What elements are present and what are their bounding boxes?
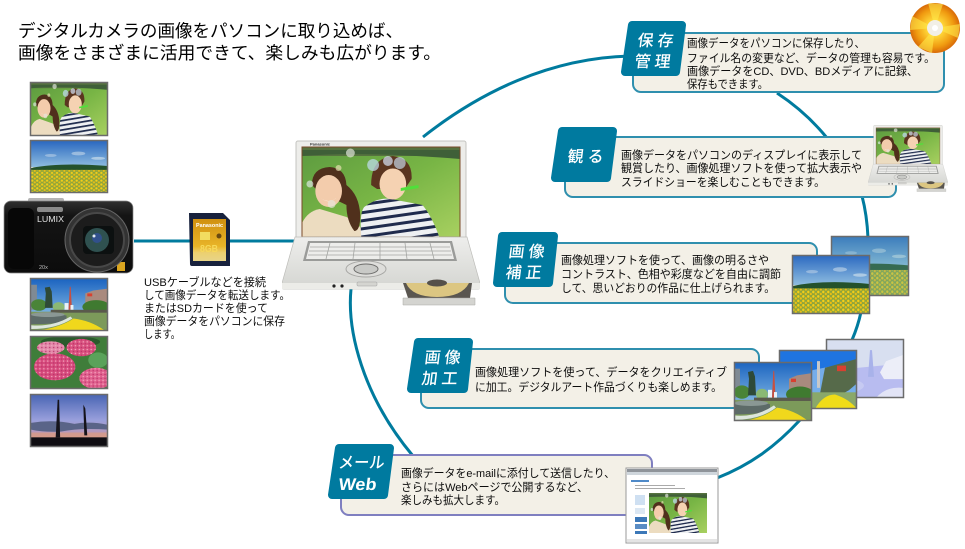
badge: 観る	[555, 131, 613, 178]
panel: 画像補正: コントラスト、色相や彩度などを自由に調節	[561, 267, 781, 281]
caption: USB transfer: して画像データを転送します。	[144, 288, 290, 302]
badge: 保存管理	[625, 25, 682, 72]
panel: 保存管理: 保存もできます。	[687, 77, 768, 91]
title: 画像をさまざまに活用できて、楽しみも広がります。	[18, 43, 441, 63]
icon: optical disc	[910, 3, 960, 53]
panel: 保存管理: 画像データをCD、DVD、BDメディアに記録、	[687, 64, 918, 78]
badge: 画像補正: 画像	[508, 243, 546, 261]
panel: メール Web	[332, 448, 652, 515]
icon: digital camera	[4, 198, 133, 273]
icon: SD card: 8GB	[200, 244, 218, 255]
badge: 画像加工	[411, 342, 469, 389]
photo thumbnails column	[30, 82, 113, 446]
panel: 画像補正	[497, 236, 817, 303]
panel: 保存管理: 画像データをパソコンに保存したり、	[687, 36, 865, 50]
caption: USB transfer: USBケーブルなどを接続	[144, 275, 267, 289]
photos: creative edits	[734, 339, 904, 421]
panel: 観る: スライドショーを楽しむこともできます。	[621, 176, 825, 189]
icon: SD card	[189, 213, 230, 266]
panel: 観る: 観賞したり、画像処理ソフトを使って拡大表示や	[621, 161, 862, 175]
badge: 画像加工: 加工	[421, 370, 459, 388]
icon: web page screenshot	[626, 468, 718, 543]
icon: SD card: Panasonic	[196, 223, 223, 229]
title: デジタルカメラの画像をパソコンに取り込めば、	[18, 21, 403, 41]
badge: 保存管理: 管理	[634, 53, 672, 71]
caption: USB transfer: またはSDカードを使って	[144, 301, 268, 315]
badge: 画像補正: 補正	[505, 264, 543, 282]
panel: 保存管理: ファイル名の変更など、データの管理も容易です。	[687, 51, 935, 65]
icon: main laptop	[282, 141, 480, 305]
panel: 観る: 画像データをパソコンのディスプレイに表示して	[621, 148, 862, 162]
panel: 画像補正: して、思いどおりの作品に仕上げられます。	[561, 282, 775, 295]
panel: メール Web: さらにはWebページで公開するなど、	[401, 481, 588, 494]
icon: small laptop	[868, 125, 948, 192]
panel: 画像加工: に加工。デジタルアート作品づくりも楽しめます。	[475, 380, 722, 394]
badge: メール Web: Web	[338, 475, 378, 494]
panel: 画像補正: 画像処理ソフトを使って、画像の明るさや	[561, 253, 769, 267]
icon: main laptop: Panasonic	[310, 142, 331, 146]
badge: メール Web: メール	[338, 454, 386, 472]
connecting arcs	[134, 56, 868, 478]
badge: 画像補正	[497, 236, 554, 283]
panel: 画像加工: 画像処理ソフトを使って、データをクリエイティブ	[475, 365, 727, 379]
caption: USB transfer: します。	[144, 328, 180, 341]
photos: before and after correction	[792, 236, 909, 314]
badge: メール Web	[332, 448, 390, 495]
panel: 画像加工	[411, 342, 759, 408]
icon: digital camera: 20x	[39, 265, 48, 271]
panel: メール Web: 楽しみも拡大します。	[401, 493, 505, 507]
panel: 保存管理	[625, 25, 944, 92]
badge: 観る: 観る	[567, 148, 605, 166]
badge: 画像加工: 画像	[424, 349, 462, 367]
badge: 保存管理: 保存	[637, 32, 675, 50]
icon: digital camera: LUMIX	[37, 214, 64, 224]
title	[18, 21, 441, 63]
caption: USB transfer	[144, 275, 290, 341]
panel: 観る	[555, 131, 896, 197]
panel: メール Web: 画像データをe-mailに添付して送信したり、	[401, 466, 615, 480]
caption: USB transfer: 画像データをパソコンに保存	[144, 314, 285, 328]
